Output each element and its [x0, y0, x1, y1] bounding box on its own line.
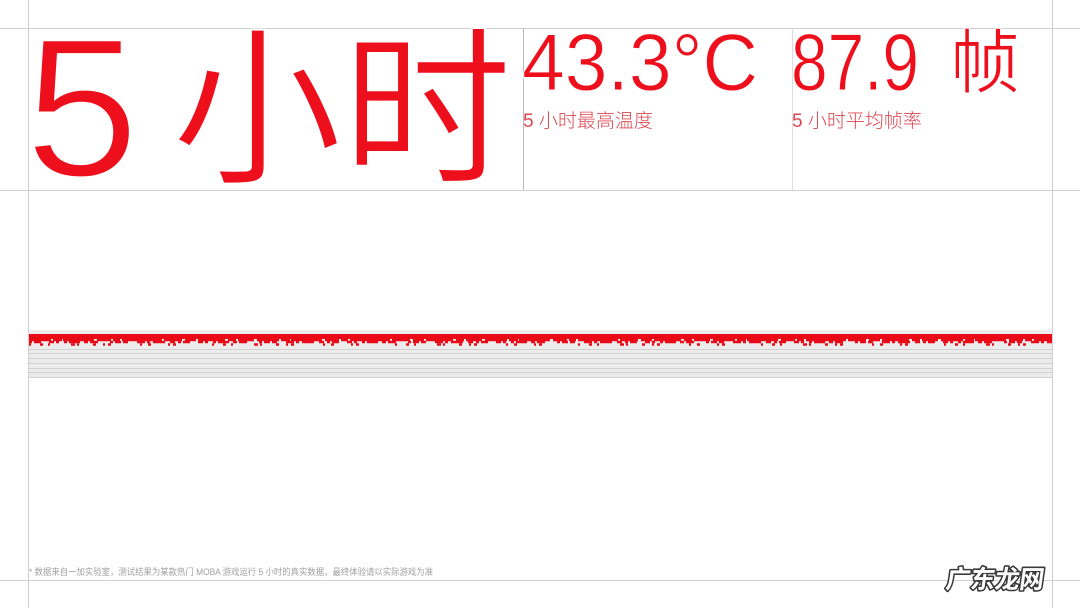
title: 5 hours: 小时 [172, 17, 512, 207]
footnote: * 数据来自一加实验室，测试结果为某款热门 MOBA 游戏运行 5 小时的真实数据，最终体验请以实际游戏为准 [29, 566, 433, 577]
title: 5 hours: 5 [25, 0, 139, 218]
chart: frame rate over five hours [29, 330, 1052, 378]
stat: maximum temperature: 5 小时最高温度 [523, 110, 653, 132]
stat: average frame rate: 5 小时平均帧率 [792, 110, 922, 132]
stat: average frame rate: 87.9 [791, 18, 919, 108]
watermark: 广东龙网 [944, 566, 1046, 594]
title: 5 hours [25, 0, 512, 218]
stat: average frame rate [792, 28, 1016, 129]
stat: maximum temperature: 43.3°C [522, 18, 758, 108]
stat: average frame rate: 帧 [950, 24, 1020, 102]
